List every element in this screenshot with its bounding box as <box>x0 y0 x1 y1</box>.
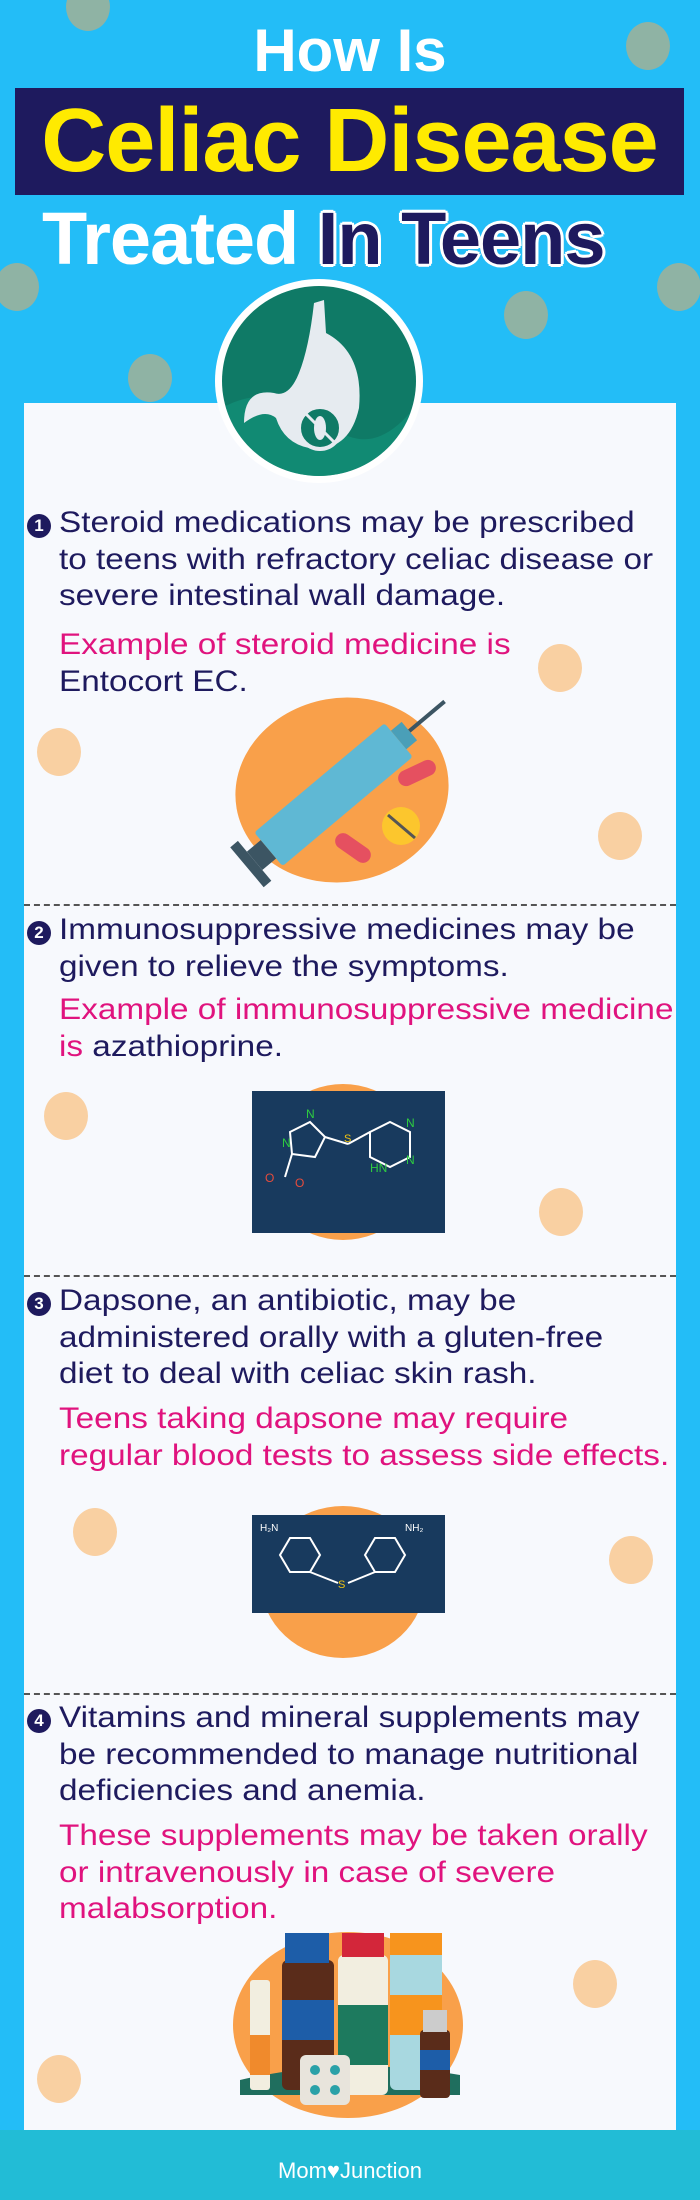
title line 3: Treated In Teens <box>42 197 604 280</box>
step 2: Immunosuppressive medicines may be <box>59 913 635 946</box>
logo: Mom♥Junction <box>278 2158 422 2183</box>
step 2: given to relieve the symptoms. <box>59 950 509 982</box>
step 2: is azathioprine. <box>59 1030 283 1062</box>
step 4: be recommended to manage nutritional <box>59 1738 638 1770</box>
step 3: diet to deal with celiac skin rash. <box>59 1357 537 1390</box>
image: azathioprine molecule: O <box>265 1171 274 1185</box>
image: dapsone molecule: NH₂ <box>405 1523 423 1534</box>
image: azathioprine molecule: O <box>295 1176 304 1190</box>
image: azathioprine molecule <box>252 1084 445 1240</box>
step 4: Vitamins and mineral supplements may <box>59 1701 640 1734</box>
image: dapsone molecule <box>252 1506 445 1658</box>
step 2: Example of immunosuppressive medicine <box>59 993 673 1026</box>
step 1: Example of steroid medicine is <box>59 628 511 661</box>
step 1: Entocort EC. <box>59 664 248 698</box>
image: dapsone molecule: S <box>338 1579 345 1591</box>
step 2 <box>27 913 673 1240</box>
image: azathioprine molecule: S <box>344 1133 351 1145</box>
step 4: malabsorption. <box>59 1892 277 1925</box>
background wheat icons <box>0 0 700 402</box>
step 2: 2 <box>34 923 44 942</box>
step 3: regular blood tests to assess side effects. <box>59 1438 669 1472</box>
footer <box>0 2130 700 2200</box>
step 3: 3 <box>34 1294 44 1313</box>
title box: Celiac Disease <box>41 91 658 191</box>
step 3: administered orally with a gluten-free <box>59 1320 603 1354</box>
icon: stomach circle <box>215 279 423 476</box>
image: azathioprine molecule: N <box>282 1136 291 1150</box>
image: azathioprine molecule: N <box>406 1153 415 1167</box>
image: azathioprine molecule: HN <box>370 1161 387 1175</box>
step 4: or intravenously in case of severe <box>59 1856 555 1888</box>
step 3 <box>27 1284 669 1658</box>
step 3: Dapsone, an antibiotic, may be <box>59 1284 516 1317</box>
step 4 <box>27 1701 648 2118</box>
image: supplement bottles <box>233 1932 463 2118</box>
step 1: Steroid medications may be prescribed <box>59 506 635 539</box>
step 4: 4 <box>34 1711 44 1730</box>
step 1 <box>27 506 653 888</box>
step 1: to teens with refractory celiac disease or <box>59 542 653 576</box>
panel wheat icons <box>37 644 653 2103</box>
step 4: These supplements may be taken orally <box>59 1819 648 1852</box>
step 3: Teens taking dapsone may require <box>59 1402 568 1435</box>
image: azathioprine molecule: N <box>306 1107 315 1121</box>
title line 1: How Is <box>253 17 447 84</box>
image: dapsone molecule: H₂N <box>260 1523 278 1534</box>
white panel <box>24 403 676 2130</box>
step 1: 1 <box>34 516 44 535</box>
image: azathioprine molecule: N <box>406 1116 415 1130</box>
image: syringe <box>230 698 449 888</box>
step 1: severe intestinal wall damage. <box>59 579 505 612</box>
step 4: deficiencies and anemia. <box>59 1774 426 1807</box>
